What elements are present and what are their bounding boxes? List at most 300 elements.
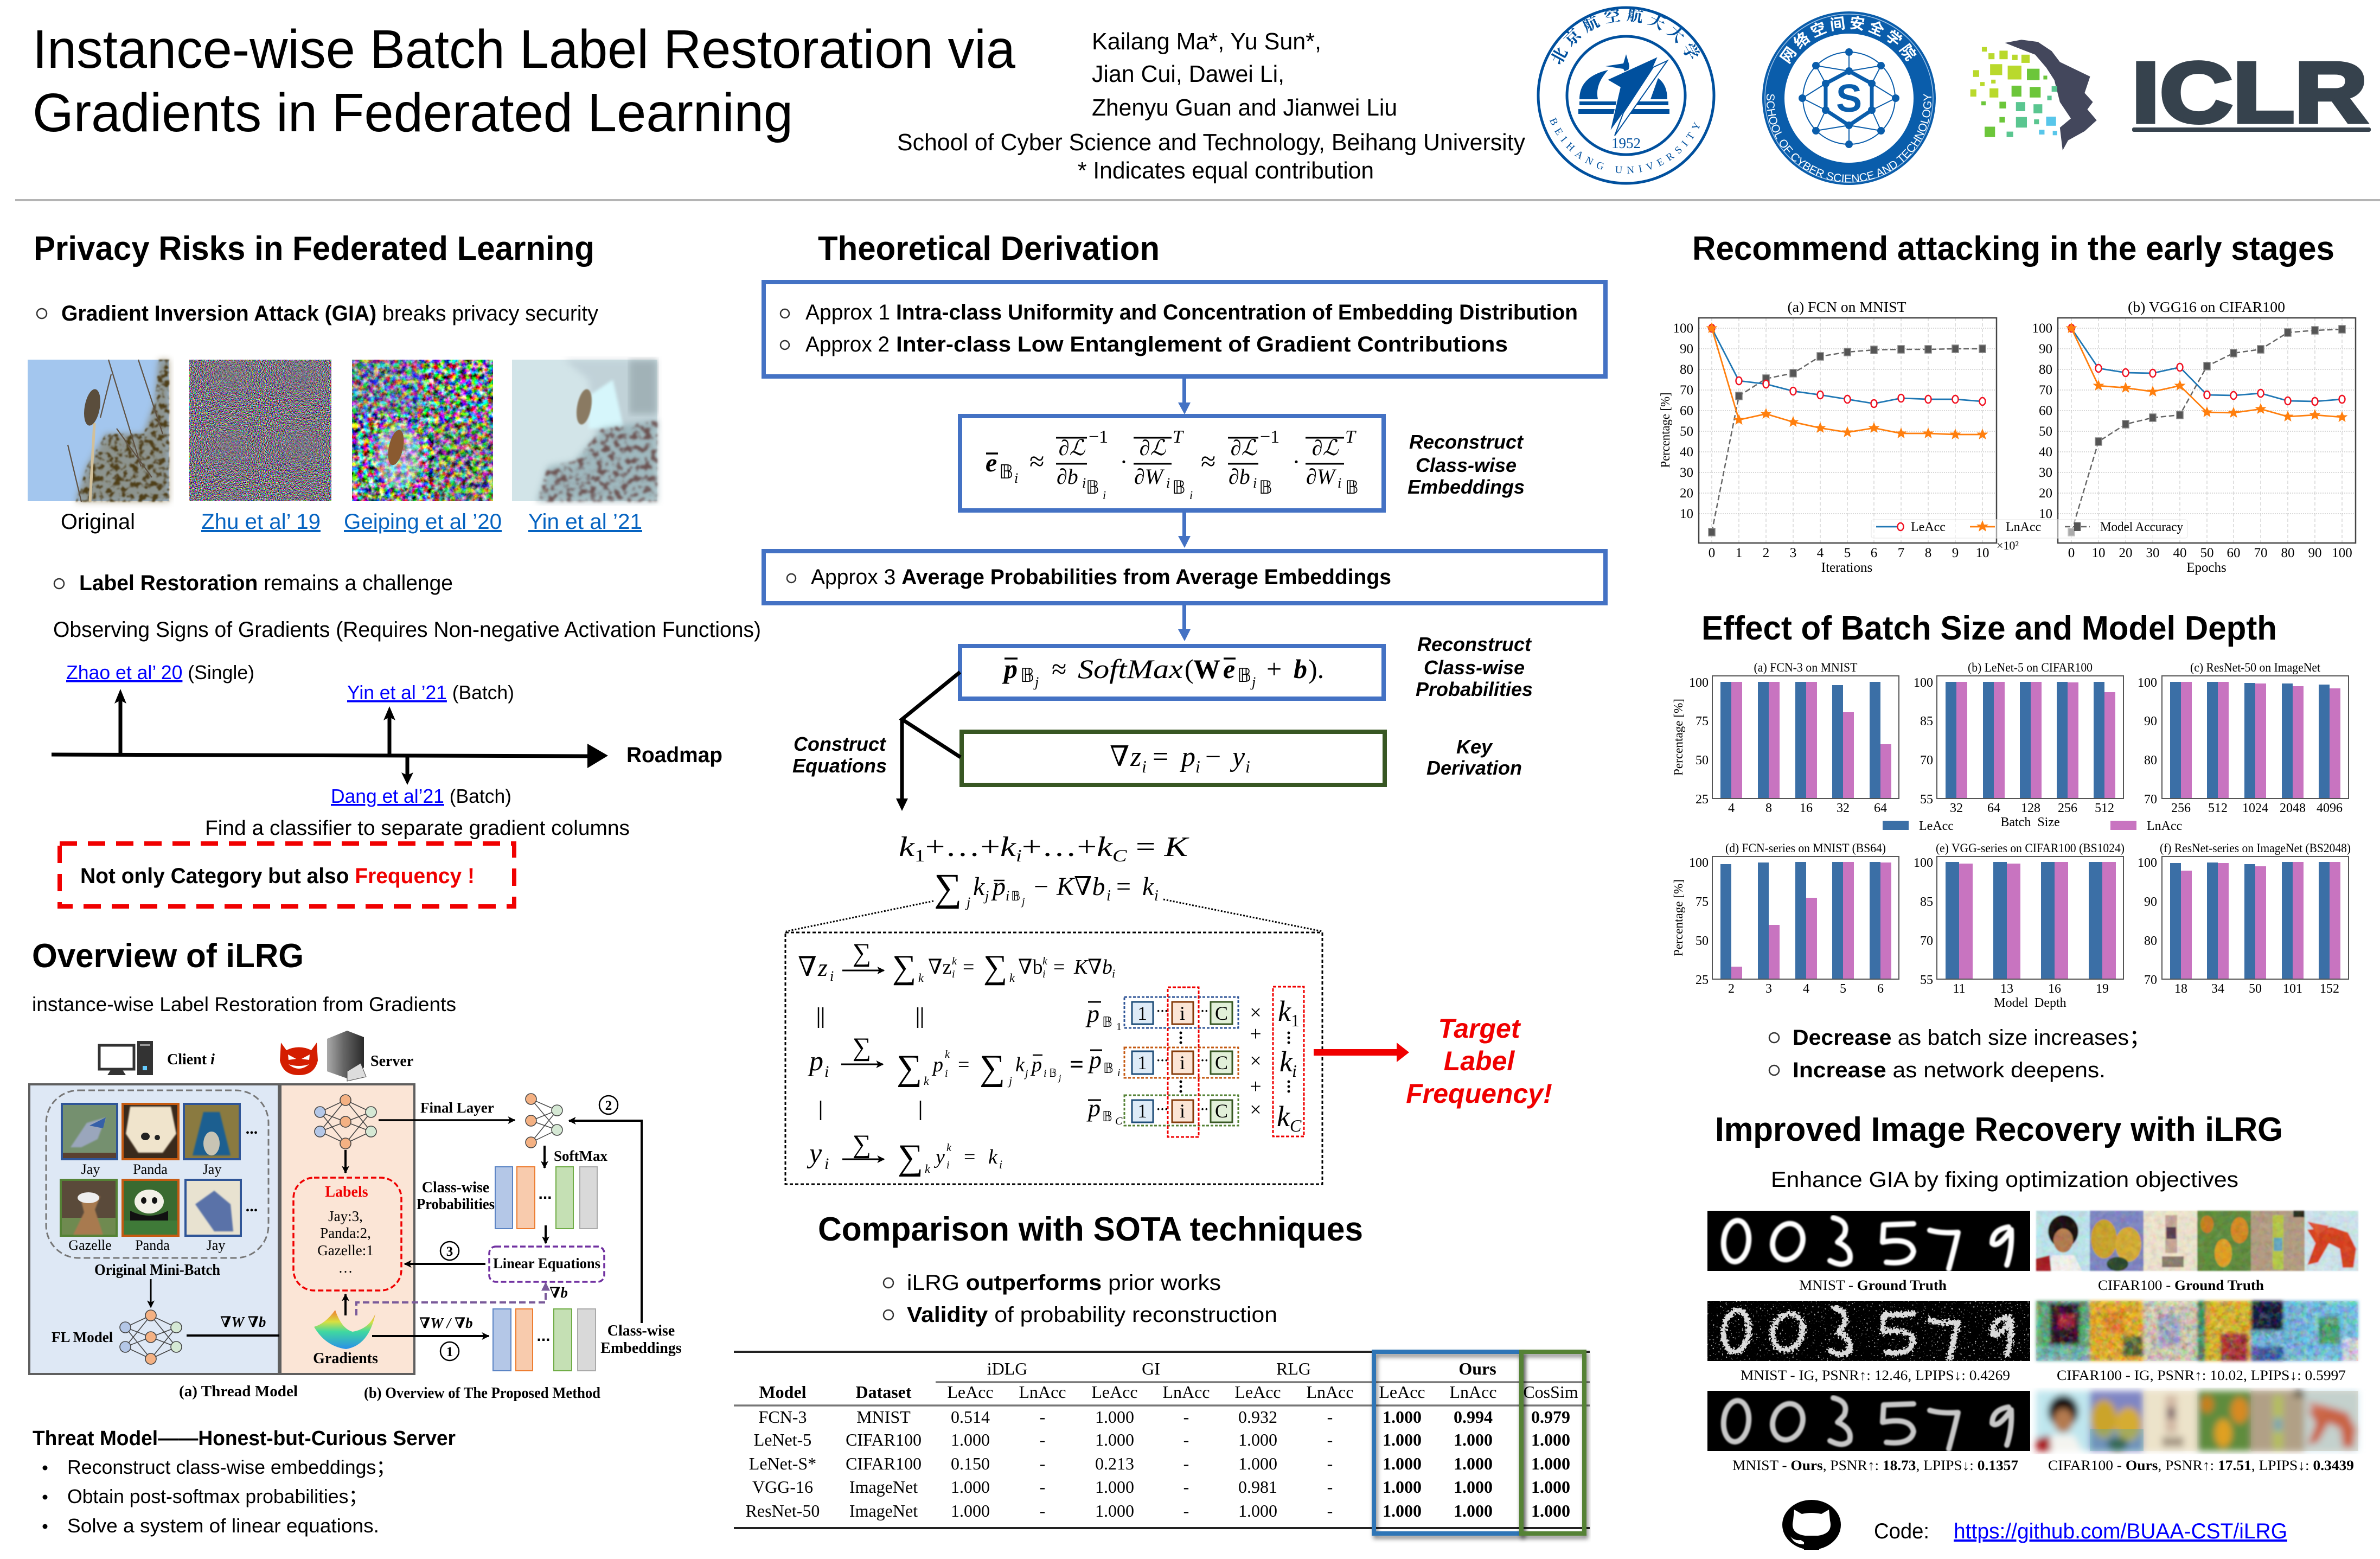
bar chart: VGG-series on CIFAR100: 13 xyxy=(2000,982,2013,996)
legend: batch size bars: LeAcc xyxy=(1919,819,1954,833)
label: gradient symbols: ∇W ∇b xyxy=(220,1314,266,1330)
line chart: FCN on MNIST: 70 xyxy=(1680,383,1693,398)
bar chart: FCN-series on MNIST: 2 xyxy=(1728,982,1735,996)
matrix: probability cells: i xyxy=(1180,1052,1185,1074)
table: accuracy comparison: - xyxy=(1327,1477,1333,1497)
line chart: VGG16 on CIFAR100: Epochs xyxy=(2186,560,2227,575)
table: accuracy comparison: CIFAR100 xyxy=(846,1430,922,1449)
equation: sum of frequencies: k xyxy=(899,832,911,862)
bar chart: VGG-series on CIFAR100: 11 xyxy=(1953,982,1966,996)
line chart: FCN on MNIST xyxy=(1659,299,2019,575)
label: client i: Client i xyxy=(167,1051,215,1068)
image: jay 2 xyxy=(184,1104,240,1159)
equation row: p: k xyxy=(945,1049,950,1060)
image captions: Original xyxy=(61,510,135,534)
box: approximation 3: Approx 3 Average Probabilities from Average Embeddings xyxy=(811,565,1391,589)
legend: batch size bars: LnAcc xyxy=(2147,819,2182,833)
image captions: Geiping et al ’20 xyxy=(344,510,502,534)
equation row: p: 𝔹 xyxy=(1049,1066,1057,1079)
equation row: nabla z: = xyxy=(1053,956,1065,979)
bar chart: ResNet-series on ImageNet: 34 xyxy=(2211,982,2224,996)
line chart: VGG16 on CIFAR100: 100 xyxy=(2332,546,2352,560)
table: accuracy comparison: 1.000 xyxy=(1454,1430,1493,1449)
image: original owl xyxy=(28,360,169,502)
labels: mini-batch classes: Panda xyxy=(133,1161,168,1177)
line chart: VGG16 on CIFAR100: 60 xyxy=(2039,404,2052,418)
text: find a classifier: Find a classifier to separate gradient columns xyxy=(205,817,630,840)
table: accuracy comparison: - xyxy=(1183,1407,1189,1427)
equation row: nabla z: k xyxy=(918,971,924,985)
table: accuracy comparison: 0.994 xyxy=(1454,1407,1493,1427)
line chart: FCN on MNIST: 80 xyxy=(1680,362,1693,377)
bar chart: LeNet-5 on CIFAR100: 100 xyxy=(1914,676,1933,690)
box: approximations 1 and 2: Inter-class Low Entanglement of Gradient Contributions xyxy=(896,333,1508,356)
equation row: p: k xyxy=(1015,1053,1025,1076)
image: CIFAR ground truth xyxy=(2036,1211,2358,1271)
bar chart: ResNet-50 on ImageNet: 2048 xyxy=(2280,801,2306,815)
chart: roadmap timeline: Dang et al’21 (Batch) xyxy=(331,785,511,807)
bar chart: VGG-series on CIFAR100: 19 xyxy=(2096,982,2109,996)
box: embedding equation: T xyxy=(1173,427,1184,447)
box: approximation 3 xyxy=(764,551,1605,603)
heading: theoretical derivation: Theoretical Derivation xyxy=(818,230,1160,267)
box: key derivation equation: y xyxy=(1230,742,1245,772)
annotation: construct equations: Equations xyxy=(792,755,887,777)
legend: line charts xyxy=(1871,520,2187,538)
table: accuracy comparison: 1.000 xyxy=(1531,1430,1570,1449)
connector: construct equations xyxy=(896,672,961,811)
box: embedding equation: ∂W xyxy=(1134,464,1165,489)
matrix: operators: × xyxy=(1250,1050,1262,1072)
matrix: probability cells: ··· xyxy=(1197,1053,1208,1067)
labels: mini-batch classes: Panda xyxy=(135,1237,170,1253)
equality bars xyxy=(818,1007,922,1120)
caption: IG xyxy=(1741,1368,2346,1383)
matrix: probability cells: C xyxy=(1215,1002,1228,1024)
box: linear equations: Linear Equations xyxy=(493,1255,600,1272)
bar chart: VGG-series on CIFAR100: 85 xyxy=(1920,895,1933,909)
equation row: nabla z: ∇ xyxy=(798,951,817,982)
bar chart: ResNet-series on ImageNet: 100 xyxy=(2138,856,2157,870)
table: accuracy comparison: iDLG xyxy=(987,1359,1027,1378)
bar chart: ResNet-50 on ImageNet: (c) ResNet-50 on ImageNet xyxy=(2190,661,2321,674)
matrix: probability cells: C xyxy=(1215,1052,1228,1074)
box: embedding equation: · xyxy=(1120,449,1128,475)
table: accuracy comparison: Model xyxy=(759,1382,807,1402)
highlight: ours columns xyxy=(1374,1352,1521,1534)
box: probability equation xyxy=(960,646,1384,699)
equation row: p: i xyxy=(945,1068,948,1079)
box: key derivation equation: p xyxy=(1179,742,1195,772)
table: accuracy comparison: LeAcc xyxy=(1091,1382,1138,1402)
annotation: key derivation: Derivation xyxy=(1426,757,1522,779)
logo: School of Cyber Science and Technology: 网络空间安全学院 xyxy=(1779,16,1917,64)
equation row: y: k xyxy=(988,1146,998,1168)
matrix: row labels: 𝔹 xyxy=(1102,1014,1112,1031)
bar chart: FCN-3 on MNIST: 4 xyxy=(1728,801,1735,815)
table: accuracy comparison: Ours xyxy=(1458,1359,1496,1378)
chart: roadmap timeline: Zhao et al’ 20 (Single) xyxy=(66,661,254,683)
line chart: VGG16 on CIFAR100: 30 xyxy=(2146,546,2160,560)
table: accuracy comparison: Dataset xyxy=(855,1382,912,1402)
heading: recommend: Recommend attacking in the early stages xyxy=(1692,230,2334,267)
box: embedding equation: i xyxy=(1253,475,1257,491)
text: code link: https://github.com/BUAA-CST/iLRG xyxy=(1954,1519,2287,1543)
bar chart: FCN-series on MNIST: 3 xyxy=(1765,982,1772,996)
arrow: to embeddings xyxy=(1178,376,1191,414)
table: accuracy comparison: - xyxy=(1040,1407,1045,1427)
label: server: Server xyxy=(370,1053,413,1070)
panel: equation expansion xyxy=(785,932,1322,1184)
header: authors and affiliation: School of Cyber Science and Technology, Beihang University xyxy=(897,129,1525,156)
box: probability equation: ( xyxy=(1185,654,1194,684)
table: accuracy comparison xyxy=(734,1352,1590,1534)
labels: mini-batch classes: ... xyxy=(246,1197,258,1215)
equation: sum of frequencies: i xyxy=(1016,846,1022,865)
table: accuracy comparison: LeNet-5 xyxy=(754,1430,811,1449)
table: accuracy comparison: - xyxy=(1183,1454,1189,1473)
box: key derivation equation: z xyxy=(1130,742,1141,772)
equation: linear system row: ∑ xyxy=(934,866,962,909)
table: accuracy comparison: 1.000 xyxy=(1531,1477,1570,1497)
arrow: probabilities to equations xyxy=(545,1225,547,1243)
logo: School of Cyber Science and Technology xyxy=(1762,11,1936,185)
image: gazelle xyxy=(61,1180,117,1236)
heading: improved image recovery: Improved Image Recovery with iLRG xyxy=(1715,1111,2283,1148)
bar chart: ResNet-50 on ImageNet: 256 xyxy=(2171,801,2191,815)
box: embedding equation: i xyxy=(1014,470,1018,486)
bar chart: ResNet-series on ImageNet: 70 xyxy=(2144,973,2157,987)
matrix: operators: × xyxy=(1250,1098,1262,1121)
matrix: frequencies k xyxy=(1277,995,1302,1135)
equation row: p: j xyxy=(1023,1068,1028,1079)
header: authors and affiliation: * Indicates equal contribution xyxy=(1078,157,1374,184)
equation: linear system row: j xyxy=(1020,896,1025,908)
equation row: p: ∑ xyxy=(980,1048,1005,1088)
table: accuracy comparison: 1.000 xyxy=(951,1477,990,1497)
bar chart: ResNet-50 on ImageNet: 4096 xyxy=(2317,801,2343,815)
bars: class-wise embeddings xyxy=(493,1309,596,1371)
bar chart: VGG-series on CIFAR100: 55 xyxy=(1920,973,1933,987)
equation row: y: ∑ xyxy=(853,1130,871,1159)
bar chart: ResNet-series on ImageNet: 152 xyxy=(2320,982,2339,996)
annotation: key derivation xyxy=(1426,736,1522,779)
table: accuracy comparison: 1.000 xyxy=(1238,1430,1277,1449)
matrix: probability cells: ··· xyxy=(1197,1102,1208,1116)
step marker 1: 1 xyxy=(446,1345,453,1359)
text: threat model: Solve a system of linear equations. xyxy=(67,1515,379,1537)
table: accuracy comparison: - xyxy=(1327,1501,1333,1520)
bar chart: VGG-series on CIFAR100: 100 xyxy=(1914,856,1933,870)
matrix: operators: × xyxy=(1250,1001,1262,1024)
bar chart: FCN-3 on MNIST: 75 xyxy=(1696,714,1709,729)
text: threat model: Reconstruct class-wise embeddings； xyxy=(67,1456,395,1478)
line chart: VGG16 on CIFAR100: 10 xyxy=(2039,507,2052,521)
line chart: FCN on MNIST: 10 xyxy=(1975,546,1989,560)
text: threat model: Threat Model——Honest-but-Curious Server xyxy=(33,1427,456,1450)
matrix: row labels: 1 xyxy=(1116,1021,1122,1033)
annotation: reconstruct class-wise probabilities xyxy=(1416,633,1533,700)
line chart: FCN on MNIST: 9 xyxy=(1952,546,1959,560)
table: accuracy comparison: 1.000 xyxy=(1383,1477,1422,1497)
image: jay 3 xyxy=(185,1180,241,1236)
image captions xyxy=(61,510,642,534)
table: accuracy comparison: 1.000 xyxy=(1454,1501,1493,1520)
table: accuracy comparison: 1.000 xyxy=(1454,1454,1493,1473)
matrix: dashed row groups xyxy=(1124,997,1238,1126)
logo: Beihang University: 北京航空航天大学 xyxy=(1551,9,1700,64)
arrow: gradients sent to server xyxy=(187,1334,304,1337)
equation row: p xyxy=(807,1033,1084,1088)
box: embedding equation: −1 xyxy=(1089,427,1108,447)
box: embedding equation: 𝔹 xyxy=(1086,477,1099,499)
matrix: probability cells: ··· xyxy=(1156,1004,1168,1018)
equation row: p: p xyxy=(931,1053,943,1076)
box: approximations 1 and 2: Approx 1 Intra-class Uniformity and Concentration of Embedding Distribution xyxy=(805,301,1578,324)
equation row: nabla z: ∑ xyxy=(892,949,916,986)
line chart: VGG16 on CIFAR100: 70 xyxy=(2254,546,2267,560)
bar chart: FCN-series on MNIST: 6 xyxy=(1877,982,1884,996)
equation row: nabla z xyxy=(798,938,1115,986)
table: accuracy comparison: VGG-16 xyxy=(752,1477,813,1497)
bar chart: ResNet-50 on ImageNet: 512 xyxy=(2208,801,2228,815)
text: code link: Code: xyxy=(1874,1519,1929,1543)
line chart: VGG16 on CIFAR100: 100 xyxy=(2032,321,2052,336)
bar chart: LeNet-5 on CIFAR100: (b) LeNet-5 on CIFAR100 xyxy=(1968,661,2093,674)
bar chart: FCN-series on MNIST: 75 xyxy=(1696,895,1709,909)
matrix: row labels xyxy=(1085,1000,1123,1127)
highlight: cosine similarity column xyxy=(1521,1352,1584,1534)
line chart: VGG16 on CIFAR100: 20 xyxy=(2039,486,2052,501)
matrix: operators xyxy=(1250,1001,1262,1121)
equation row: y: k xyxy=(925,1162,931,1175)
table: accuracy comparison: FCN-3 xyxy=(759,1407,807,1427)
table: accuracy comparison: 0.150 xyxy=(951,1454,990,1473)
equation row: p: ∑ xyxy=(897,1048,922,1088)
bar chart: ResNet-series on ImageNet: 18 xyxy=(2174,982,2187,996)
callout: not only category but also frequency: Not only Category but also Frequency ! xyxy=(80,864,475,888)
box: linear equations xyxy=(489,1247,604,1282)
caption: diagram xyxy=(179,1383,600,1402)
table: accuracy comparison: 1.000 xyxy=(1383,1454,1422,1473)
label: class-wise embeddings xyxy=(600,1322,682,1357)
callout: target label frequency: Target xyxy=(1438,1013,1521,1044)
line chart: FCN on MNIST: 8 xyxy=(1925,546,1931,560)
box: embedding equation: e xyxy=(986,449,997,477)
equation row: nabla z: ∑ xyxy=(983,949,1007,986)
line chart: VGG16 on CIFAR100: 0 xyxy=(2068,546,2075,560)
bar chart: FCN-3 on MNIST: 50 xyxy=(1696,753,1709,768)
line chart: FCN on MNIST: 40 xyxy=(1680,445,1693,459)
equation row: nabla z: ∇b xyxy=(1018,956,1043,979)
logo: Beihang University: 1952 xyxy=(1611,135,1641,151)
annotation: reconstruct class-wise embeddings: Class-wise xyxy=(1416,454,1517,476)
arrow: to target label frequency xyxy=(1314,1043,1409,1062)
labels: mini-batch classes: Gazelle xyxy=(68,1237,112,1253)
legend: line charts: LnAcc xyxy=(2006,520,2041,534)
box: key derivation equation: i xyxy=(1195,757,1200,776)
line chart: VGG16 on CIFAR100: 40 xyxy=(2039,445,2052,459)
equation row: y: ∑ xyxy=(898,1138,923,1177)
icon: server xyxy=(327,1031,366,1081)
table: accuracy comparison: LnAcc xyxy=(1019,1382,1066,1402)
line chart: FCN on MNIST: ×10² xyxy=(1997,539,2019,552)
equation: linear system row: i xyxy=(1106,887,1111,904)
arrow: final layer xyxy=(379,1119,515,1121)
box: embedding equation: ∂ℒ xyxy=(1231,436,1257,460)
table: accuracy comparison: 1.000 xyxy=(1238,1501,1277,1520)
line chart: VGG16 on CIFAR100: 80 xyxy=(2039,362,2052,377)
box: labels: Jay:3, xyxy=(328,1208,363,1224)
caption: ground truth xyxy=(1799,1277,2264,1293)
box: probability equation: SoftMax xyxy=(1078,654,1183,684)
logo: ICLR: ICLR xyxy=(2132,45,2368,140)
label: original mini-batch: Original Mini-Batch xyxy=(94,1262,220,1279)
equation: linear system row: i xyxy=(1154,887,1159,904)
bar chart: LeNet-5 on CIFAR100: 70 xyxy=(1920,753,1933,768)
box: key derivation equation: = xyxy=(1153,742,1168,772)
bullet: label restoration: Label Restoration remains a challenge xyxy=(79,571,453,595)
annotation: reconstruct class-wise probabilities: Class-wise xyxy=(1424,656,1525,679)
chart: roadmap timeline: Roadmap xyxy=(626,743,722,767)
arrow: batch to model xyxy=(150,1279,152,1307)
image captions: Yin et al ’21 xyxy=(528,510,642,534)
table: accuracy comparison: 0.932 xyxy=(1238,1407,1277,1427)
image: panda 1 xyxy=(123,1104,178,1159)
chart: roadmap timeline xyxy=(52,661,722,807)
equation: linear system row: = xyxy=(1116,872,1131,901)
heading: overview: Overview of iLRG xyxy=(32,937,304,975)
logo: School of Cyber Science and Technology: SCHOOL OF CYBER SCIENCE AND TECHNOLOGY xyxy=(1766,94,1931,182)
bar chart: FCN-3 on MNIST xyxy=(1672,661,1899,815)
callout: target label frequency: Label xyxy=(1444,1046,1515,1076)
box: embedding equation: ∂ℒ xyxy=(1312,436,1339,460)
table: accuracy comparison: 1.000 xyxy=(1238,1454,1277,1473)
box: probability equation: p xyxy=(1002,654,1018,684)
line chart: FCN on MNIST: 5 xyxy=(1844,546,1851,560)
labels: mini-batch classes: Jay xyxy=(81,1161,100,1177)
equation row: p: i xyxy=(1044,1068,1047,1079)
image: jay 1 xyxy=(62,1104,117,1159)
table: accuracy comparison: - xyxy=(1327,1454,1333,1473)
box: labels: Gazelle:1 xyxy=(317,1242,374,1258)
matrix: row labels: p xyxy=(1085,1000,1099,1027)
line chart: FCN on MNIST: Iterations xyxy=(1821,560,1872,575)
panel: privacy risks in federated learning xyxy=(28,230,761,906)
text: observing signs: Observing Signs of Gradients (Requires Non-negative Activation Functions) xyxy=(53,618,761,642)
text: threat model: Obtain post-softmax probabilities； xyxy=(67,1485,368,1507)
table: accuracy comparison: 1.000 xyxy=(951,1501,990,1520)
labels: mini-batch classes xyxy=(68,1120,258,1253)
equation row: y xyxy=(807,1130,1002,1177)
panel: overview of iLRG xyxy=(29,937,682,1537)
box: key derivation equation: i xyxy=(1245,757,1250,776)
panel: improved image recovery xyxy=(1707,1111,2358,1550)
box: probability equation: j xyxy=(1033,674,1039,690)
box: embedding equation: i xyxy=(1082,475,1086,491)
bar chart: ResNet-50 on ImageNet: 1024 xyxy=(2242,801,2268,815)
box: probability equation: j xyxy=(1250,674,1256,690)
step marker 3 xyxy=(440,1242,459,1260)
box: embedding equation: 𝔹 xyxy=(1259,477,1272,499)
bar chart: FCN-3 on MNIST: (a) FCN-3 on MNIST xyxy=(1754,661,1857,674)
callout: not only category but also frequency xyxy=(60,844,514,906)
equation: sum of frequencies xyxy=(899,832,1189,865)
equation row: y: y xyxy=(807,1138,822,1169)
heading: privacy risks: Privacy Risks in Federated Learning xyxy=(34,230,594,267)
annotation: reconstruct class-wise probabilities: Probabilities xyxy=(1416,678,1533,700)
bar chart: ResNet-50 on ImageNet xyxy=(2138,661,2349,815)
box: embedding equation: 𝔹 xyxy=(1172,477,1186,499)
icon: gradient bowl xyxy=(314,1310,375,1349)
table: accuracy comparison: 1.000 xyxy=(1095,1407,1134,1427)
bar chart: FCN-series on MNIST: 100 xyxy=(1689,856,1709,870)
equation row: p: = xyxy=(958,1053,969,1076)
icon: client computer xyxy=(99,1041,153,1075)
step marker 1 xyxy=(440,1342,459,1360)
equation row: nabla z: = xyxy=(963,956,974,979)
line chart: VGG16 on CIFAR100: 70 xyxy=(2039,383,2052,398)
line chart: FCN on MNIST: 20 xyxy=(1680,486,1693,501)
table: accuracy comparison: 0.981 xyxy=(1238,1477,1277,1497)
annotation: reconstruct class-wise embeddings xyxy=(1407,431,1525,498)
table: accuracy comparison: - xyxy=(1183,1477,1189,1497)
label: gradients: Gradients xyxy=(313,1350,378,1367)
bars: class-wise probabilities: ... xyxy=(538,1185,552,1203)
matrix: row labels: C xyxy=(1115,1115,1123,1127)
matrix: row labels: p xyxy=(1086,1094,1101,1122)
box: key derivation equation: − xyxy=(1205,742,1221,772)
table: accuracy comparison: 1.000 xyxy=(1095,1430,1134,1449)
matrix: frequencies k: k xyxy=(1279,1045,1293,1078)
legend: line charts: LeAcc xyxy=(1911,520,1946,534)
subheading: instance-wise label restoration: instance-wise Label Restoration from Gradients xyxy=(32,993,456,1015)
equation: sum of frequencies: K xyxy=(1165,832,1183,862)
bar chart: FCN-series on MNIST: 50 xyxy=(1696,934,1709,948)
matrix: row labels: i xyxy=(1117,1067,1121,1079)
equation: linear system row: p xyxy=(991,872,1006,901)
line chart: FCN on MNIST: Percentage [%] xyxy=(1659,393,1673,468)
matrix: row labels: 𝔹 xyxy=(1102,1109,1112,1125)
table: accuracy comparison: CIFAR100 xyxy=(846,1454,922,1473)
box: labels: Labels xyxy=(325,1184,368,1200)
arrow: gradients to embeddings xyxy=(372,1335,489,1337)
equation: linear system row: K∇b xyxy=(1056,872,1105,901)
box: probability equation: 𝔹 xyxy=(1237,665,1251,687)
table: accuracy comparison: GI xyxy=(1142,1359,1160,1378)
line chart: FCN on MNIST: 100 xyxy=(1673,321,1693,336)
header: title: Instance-wise Batch Label Restoration via xyxy=(33,19,1015,80)
step marker 2: 2 xyxy=(605,1098,612,1113)
bar chart: VGG-series on CIFAR100: 16 xyxy=(2048,982,2061,996)
table: accuracy comparison: 1.000 xyxy=(951,1430,990,1449)
annotation: reconstruct class-wise probabilities: Reconstruct xyxy=(1417,633,1532,655)
label: FL model: FL Model xyxy=(52,1329,113,1345)
equation: linear system row: j xyxy=(965,894,970,910)
box: embedding equation: i xyxy=(1338,475,1341,491)
label: softmax: SoftMax xyxy=(554,1148,607,1164)
matrix: probability cells: 1 xyxy=(1137,1100,1147,1122)
caption: ground truth: CIFAR100 - Ground Truth xyxy=(2098,1277,2264,1293)
icon: FL network xyxy=(120,1310,182,1364)
equation: linear system row: k xyxy=(973,872,986,901)
table: accuracy comparison: ImageNet xyxy=(849,1501,918,1520)
image: MNIST ours xyxy=(1707,1391,2030,1451)
table: accuracy comparison: RLG xyxy=(1276,1359,1311,1378)
table: accuracy comparison: MNIST xyxy=(856,1407,911,1427)
bars: class-wise probabilities xyxy=(495,1167,597,1229)
image: Yin reconstruction xyxy=(512,360,657,502)
